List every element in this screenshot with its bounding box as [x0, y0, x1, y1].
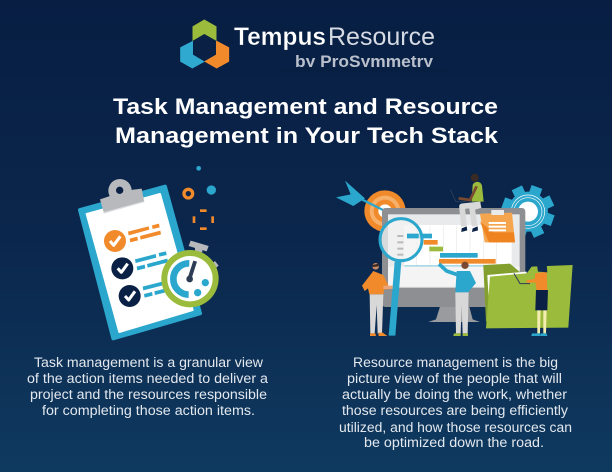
title: Task Management and Resource	[113, 94, 498, 119]
target with arrow	[336, 181, 406, 232]
text block: resource management	[339, 355, 572, 450]
logo: Tempus Resource by ProSymmetry	[181, 20, 435, 71]
illustration: clipboard with checklist and stopwatch	[80, 166, 219, 338]
text block: resource management: those resources are being efficiently	[342, 403, 568, 418]
folder	[483, 264, 573, 328]
magnifying glass	[380, 219, 422, 336]
icon: stopwatch	[161, 241, 219, 307]
logo: Tempus Resource by ProSymmetry: Resource	[328, 23, 435, 51]
person centre in blue	[439, 262, 476, 336]
clipboard clip	[100, 179, 144, 213]
person left in orange	[362, 263, 393, 336]
gear	[501, 185, 555, 238]
monitor body	[382, 208, 525, 307]
text block: resource management: be optimized down the road.	[364, 435, 544, 450]
icon: hexagon logo mark	[181, 20, 229, 68]
text block: resource management: actually be doing the work, whether	[342, 387, 568, 402]
illustration: resource management monitor and team	[336, 174, 573, 336]
text block: resource management: utilized, and how those resources can	[339, 420, 572, 435]
title: Management in Your Tech Stack	[115, 123, 499, 148]
text block: resource management: picture view of the people that will	[347, 371, 562, 386]
orange clipboard note	[480, 210, 515, 242]
text block: task management: project and the resources responsible	[30, 387, 267, 402]
text block: task management: for completing those action items.	[42, 403, 255, 418]
checklist item: navy check one	[111, 251, 168, 279]
clipboard board	[80, 187, 200, 338]
decorative icons: dots and rings	[184, 166, 216, 230]
checklist item: navy check two	[119, 281, 166, 307]
text block: task management: Task management is a granular view	[34, 355, 263, 370]
text block: resource management: Resource management is the big	[353, 355, 558, 370]
checklist item: orange check	[104, 224, 161, 252]
monitor stand	[428, 307, 480, 322]
gantt chart	[404, 225, 512, 267]
logo wordmark: Tempus	[234, 23, 326, 51]
logo byline: by ProSymmetry	[295, 52, 434, 71]
person sitting with laptop	[450, 174, 484, 232]
clipboard paper	[87, 194, 193, 332]
title	[113, 94, 499, 148]
person right with laptop	[514, 262, 548, 336]
text block: task management	[27, 355, 269, 418]
text block: task management: of the action items needed to deliver a	[27, 371, 269, 386]
